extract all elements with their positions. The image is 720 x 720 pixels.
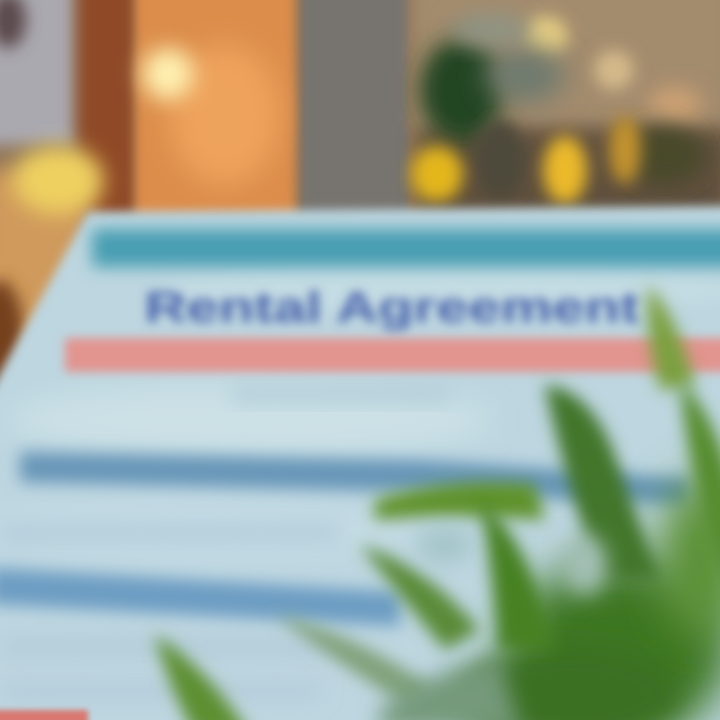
second blue section band xyxy=(0,568,400,626)
header band xyxy=(92,229,720,267)
background potted plant xyxy=(411,14,705,204)
faint text line xyxy=(230,385,450,403)
first blue section band xyxy=(20,452,690,506)
faint text rows xyxy=(0,525,340,697)
heading, blurred: Rental Agreement xyxy=(144,283,640,332)
background room behind the document xyxy=(0,0,720,400)
lamp glow lights xyxy=(13,16,701,214)
red highlighted line xyxy=(65,338,720,372)
red line at lower left edge xyxy=(0,710,88,720)
document sheet xyxy=(0,206,720,720)
foreground fern plant xyxy=(155,285,720,720)
